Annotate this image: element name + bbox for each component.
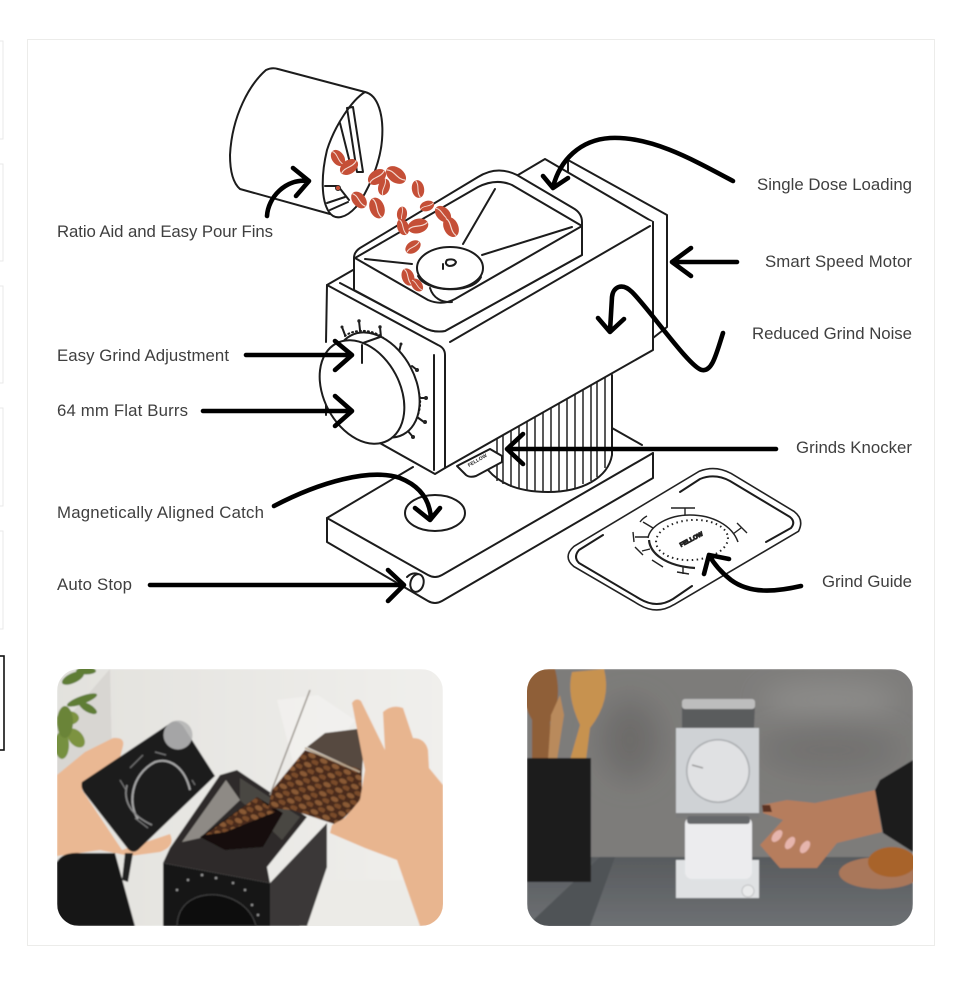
grinder front (163, 863, 270, 926)
sleeve (875, 760, 913, 852)
grinder side (270, 823, 327, 926)
grinder (682, 708, 756, 728)
label: grind guide: Grind Guide (822, 572, 912, 591)
hopper knob (417, 247, 483, 302)
arrow: easy grind adjustment (246, 341, 352, 370)
jar (277, 695, 355, 790)
hopper (163, 770, 307, 883)
label: magnetically aligned catch: Magnetically Aligned Catch (57, 503, 264, 522)
plate and pastry (839, 857, 921, 889)
illustration: back housing (518, 159, 667, 343)
arrow: grind guide (704, 555, 801, 591)
auto stop button (407, 573, 426, 593)
hand (760, 790, 882, 868)
illustration: ribbed catch cylinder (488, 375, 612, 492)
arrow: ratio aid (267, 168, 309, 216)
arrow: smart speed motor (672, 248, 737, 276)
arrow: auto stop (150, 570, 404, 601)
label: reduced grind noise: Reduced Grind Noise (752, 324, 912, 343)
label: flat burrs: 64 mm Flat Burrs (57, 401, 188, 420)
label: smart speed motor: Smart Speed Motor (765, 252, 912, 271)
catch seat ring (405, 495, 465, 531)
coffee beans (328, 147, 462, 294)
plant (55, 668, 99, 759)
photo: white grinder on kitchen counter (524, 669, 921, 927)
arrow: reduced grind noise (598, 287, 723, 370)
illustration: pour cup (230, 68, 382, 217)
arrow: flat burrs (203, 396, 352, 426)
illustration: grind adjustment dial (303, 318, 437, 458)
left hand (57, 738, 172, 856)
grind scale: FELLOW (679, 531, 705, 549)
utensils and crock (524, 669, 558, 760)
arrow: magnetically aligned catch (274, 475, 440, 520)
label: easy grind adjustment: Easy Grind Adjustment (57, 346, 229, 365)
label: grinds knocker: Grinds Knocker (796, 438, 912, 457)
illustration: knocker tab (457, 449, 502, 477)
photo: pouring beans into black grinder (55, 668, 450, 930)
illustration: bean hopper (354, 170, 582, 332)
label: auto stop: Auto Stop (57, 575, 132, 594)
label: ratio aid: Ratio Aid and Easy Pour Fins (57, 222, 273, 241)
illustration: base plate (327, 428, 653, 603)
illustration: grinder line drawing (230, 68, 799, 608)
kettle (57, 853, 135, 926)
right hand (330, 699, 444, 926)
label: single dose loading: Single Dose Loading (757, 175, 912, 194)
illustration: grind guide card (570, 470, 799, 608)
tablet: grind guide (82, 722, 215, 852)
sidebar thumbnails (0, 41, 4, 750)
illustration: knocker tab: FELLOW (467, 453, 489, 469)
arrow: single dose loading (543, 138, 733, 188)
illustration: main body (326, 175, 653, 474)
arrow: grinds knocker (507, 434, 776, 464)
grind scale (633, 508, 747, 574)
